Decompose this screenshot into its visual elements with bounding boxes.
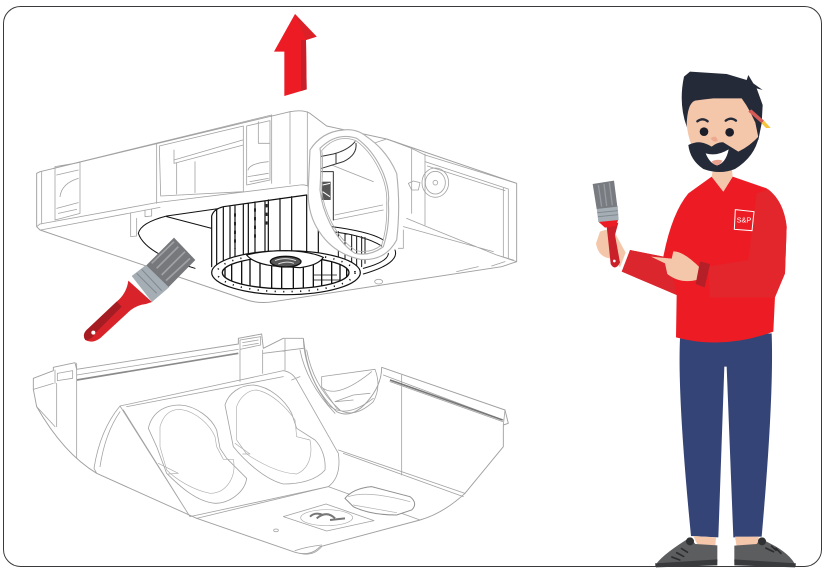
pointing hand (651, 251, 701, 281)
red up arrow (274, 14, 317, 96)
shirt logo: S&P (737, 216, 751, 225)
character (593, 72, 796, 567)
fan wheel and housing (138, 195, 396, 295)
paint brush on fan (84, 238, 195, 342)
ring collar (308, 130, 399, 260)
trousers and shoes (655, 333, 796, 567)
shirt (623, 177, 787, 343)
beard (688, 136, 759, 172)
hair (682, 72, 763, 140)
upper body (593, 72, 787, 343)
held paint brush (607, 223, 620, 268)
holding hand (596, 229, 626, 267)
upper fan unit (37, 111, 517, 342)
pencil behind ear (748, 109, 764, 123)
eyes (700, 127, 708, 136)
face (687, 98, 758, 165)
lower cover (33, 334, 508, 554)
mouth (706, 149, 729, 165)
shirt logo (734, 210, 754, 231)
